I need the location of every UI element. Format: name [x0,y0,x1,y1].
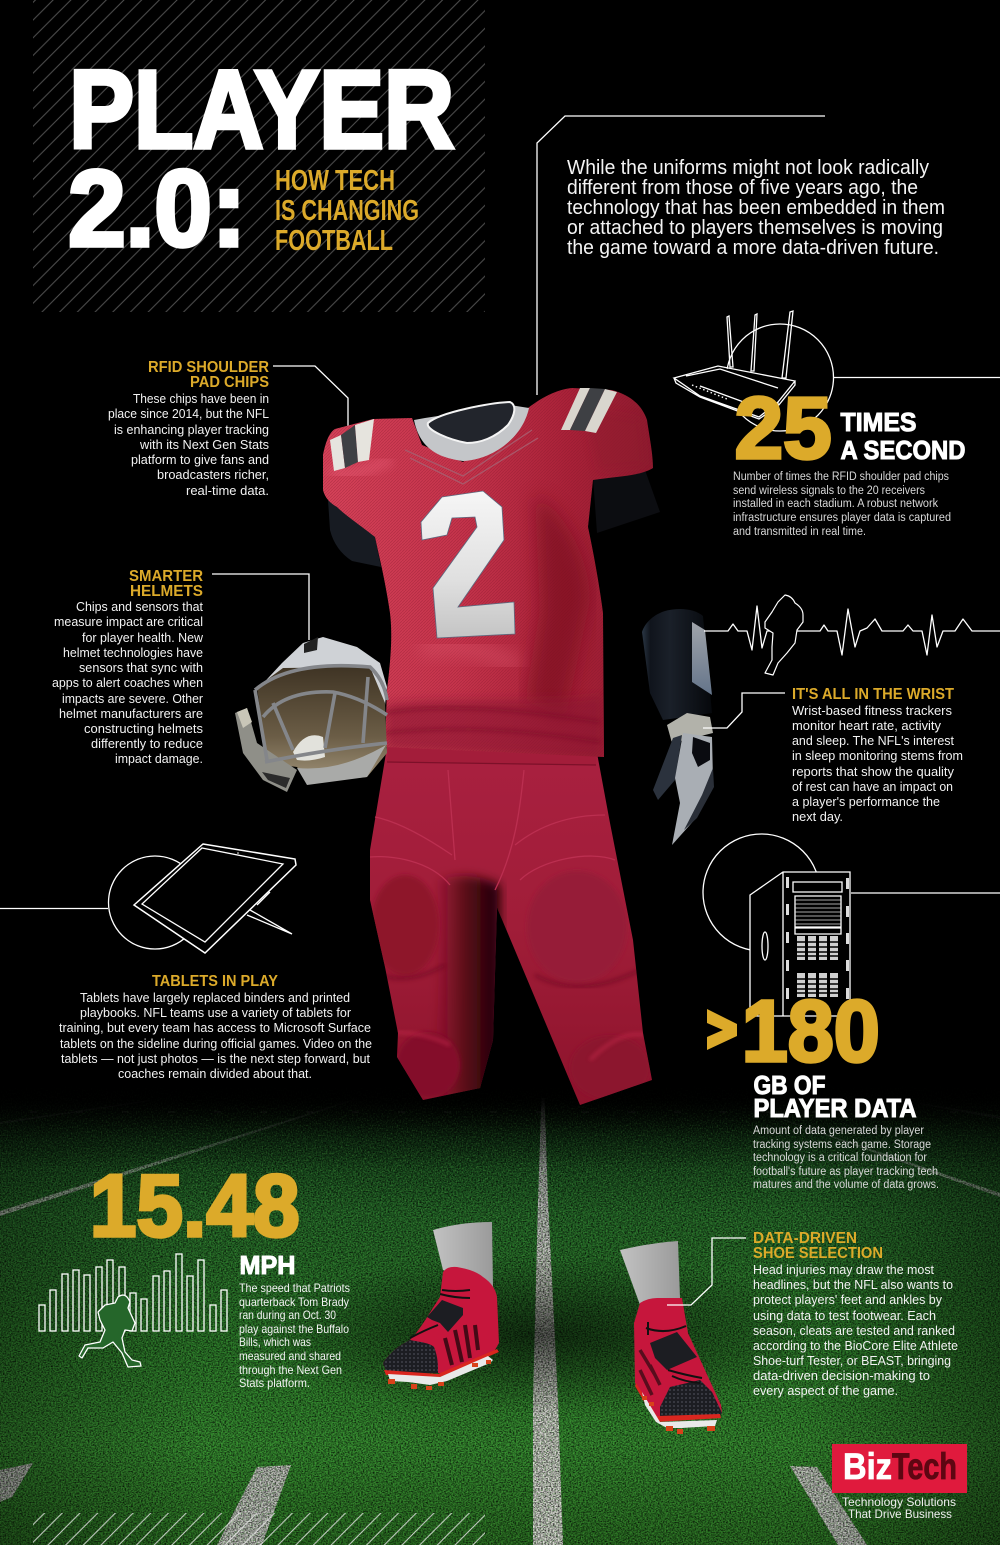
text: tablets in play: tablets — not just photos — is the next step forward, but [61,1052,371,1066]
stat: 25 times a second: 25 [735,380,832,477]
text: tablets in play: Tablets have largely replaced binders and printed [80,991,350,1005]
text: data-driven shoe selection: DATA-DRIVEN [753,1230,857,1247]
right cleat and sock [620,1241,722,1434]
stat: 15.48 MPH: measured and shared [239,1349,341,1363]
helmet [235,637,387,792]
text: RFID shoulder pad chips: place since 2014, but the NFL [108,407,269,421]
subtitle: HOW TECH [275,165,395,197]
intro paragraph: the game toward a more data-driven future. [567,237,939,259]
BizTech logo: Technology Solutions [842,1495,956,1509]
left cleat and sock [383,1222,499,1390]
BizTech logo [832,1444,967,1521]
intro paragraph: different from those of five years ago, the [567,177,918,199]
text: RFID shoulder pad chips: broadcasters richer, [157,468,269,482]
icon: router with circle [674,311,1000,431]
text: tablets in play: playbooks. NFL teams use a variety of tablets for [80,1006,351,1020]
stat: >180 GB of player data: PLAYER DATA [754,1095,916,1123]
stat: >180 GB of player data: matures and the volume of data grows. [753,1179,939,1191]
text: RFID shoulder pad chips: platform to give fans and [131,453,269,467]
BizTech logo: Tech [892,1446,957,1487]
icon: server tower with circle [703,834,1000,1016]
text: smarter helmets: HELMETS [130,583,203,600]
stat: >180 GB of player data [707,983,939,1191]
text: data-driven shoe selection [753,1230,958,1398]
stat: >180 GB of player data: 180 [742,983,880,1080]
text: tablets in play: TABLETS IN PLAY [152,973,278,990]
text: RFID shoulder pad chips: RFID SHOULDER [148,359,269,376]
text: data-driven shoe selection: using data to test footwear. Each [753,1309,936,1323]
text: smarter helmets: apps to alert coaches when [52,676,203,690]
jersey number 2 [421,491,515,638]
text: smarter helmets: for player health. New [82,631,204,645]
BizTech logo: Biz [843,1446,892,1487]
title [68,49,454,269]
text: smarter helmets: helmet manufacturers are [59,707,203,721]
stat: 15.48 MPH: ran during an Oct. 30 [239,1308,336,1322]
left undersleeve [328,500,381,567]
stat: 15.48 MPH: quarterback Tom Brady [239,1295,349,1309]
stat: 15.48 MPH [90,1156,350,1390]
text: smarter helmets: differently to reduce [91,737,203,751]
stat: 25 times a second: TIMES [840,407,916,437]
text: data-driven shoe selection: SHOE SELECTION [753,1245,883,1262]
text: data-driven shoe selection: according to the BioCore Elite Athlete [753,1339,958,1353]
text: RFID shoulder pad chips: PAD CHIPS [190,374,269,391]
text: smarter helmets: helmet technologies have [63,646,203,660]
text: it's all in the wrist: a player's performance the [792,795,940,809]
stat: 15.48 MPH: 15.48 [90,1156,300,1255]
text: smarter helmets: impact damage. [115,752,203,766]
intro leader line [537,116,825,395]
text: data-driven shoe selection: protect players' feet and ankles by [753,1293,943,1307]
text: smarter helmets: SMARTER [129,568,203,585]
text: it's all in the wrist: monitor heart rate, activity [792,719,942,733]
stat: 15.48 MPH: Stats platform. [239,1376,310,1390]
title: 2.0: [68,148,246,269]
text: smarter helmets: sensors that sync with [79,661,203,675]
text: tablets in play: coaches remain divided about that. [118,1067,312,1081]
text: RFID shoulder pad chips: with its Next Gen Stats [139,438,269,452]
stat: >180 GB of player data: technology is a critical foundation for [753,1152,927,1164]
text: smarter helmets: measure impact are critical [54,615,203,629]
intro paragraph: While the uniforms might not look radically [567,157,929,179]
text: it's all in the wrist: Wrist-based fitness trackers [792,704,952,718]
stat: >180 GB of player data: GB OF [754,1072,826,1100]
text: it's all in the wrist [792,686,963,824]
text: RFID shoulder pad chips: real-time data. [186,484,269,498]
text: smarter helmets: impacts are severe. Other [62,692,203,706]
stat: >180 GB of player data: Amount of data generated by player [753,1125,924,1137]
arm pad [642,609,712,720]
stat: 15.48 MPH: through the Next Gen [239,1363,342,1377]
stat: 15.48 MPH: play against the Buffalo [239,1322,349,1336]
stat: 25 times a second: installed in each stadium. A robust network [733,498,938,510]
stat: 25 times a second: A SECOND [840,435,966,465]
text: it's all in the wrist: next day. [792,810,843,824]
text: data-driven shoe selection: data-driven decision-making to [753,1369,930,1383]
right undersleeve [593,470,660,533]
text: smarter helmets: Chips and sensors that [76,600,204,614]
hatched title panel [33,0,485,312]
text: RFID shoulder pad chips [108,359,269,498]
text: data-driven shoe selection: Head injuries may draw the most [753,1263,935,1277]
stat: 25 times a second [733,380,966,538]
stat: 25 times a second: infrastructure ensures player data is captured [733,512,951,524]
stat: >180 GB of player data: tracking systems each game. Storage [753,1139,931,1151]
text: tablets in play [59,973,372,1081]
subtitle: FOOTBALL [275,225,393,257]
stat: 15.48 MPH: The speed that Patriots [239,1281,350,1295]
stat: 15.48 MPH: Bills, which was [239,1335,311,1349]
jersey collar [414,402,529,461]
text: it's all in the wrist: IT'S ALL IN THE WRIST [792,686,954,703]
glove [653,713,714,845]
intro paragraph: technology that has been embedded in them [567,197,945,219]
text: tablets in play: training, but every team has access to Microsoft Surface [59,1021,371,1035]
heartbeat line with runner [704,595,1000,675]
intro paragraph: or attached to players themselves is moving [567,217,943,239]
stat: >180 GB of player data: football's future as player tracking tech [753,1166,938,1178]
football field [0,1084,1000,1545]
BizTech logo: That Drive Business [848,1507,952,1521]
icon: speed bars with runner [39,1254,227,1367]
text: data-driven shoe selection: every aspect of the game. [753,1384,898,1398]
stat: 25 times a second: Number of times the RFID shoulder pad chips [733,471,949,483]
shoulder stripes [330,388,617,471]
subtitle: IS CHANGING [275,195,419,227]
bottom hatch strip [33,1513,485,1545]
text: data-driven shoe selection: Shoe-turf Tester, or BEAST, bringing [753,1354,951,1368]
text: it's all in the wrist: of rest can have an impact on [792,780,953,794]
RFID leader line [273,366,348,430]
title: PLAYER [69,49,454,172]
stat: 25 times a second: send wireless signals to the 20 receivers [733,485,925,497]
pants [370,747,652,1105]
text: it's all in the wrist: reports that show the quality [792,765,955,779]
intro paragraph [567,157,945,259]
wrist leader line [703,693,785,728]
jersey [320,385,660,760]
text: it's all in the wrist: and sleep. The NFL's interest [792,734,955,748]
helmets leader line [212,574,309,640]
stat: 15.48 MPH: MPH [240,1252,296,1280]
subtitle [275,165,419,257]
text: data-driven shoe selection: season, cleats are tested and ranked [753,1324,955,1338]
text: it's all in the wrist: in sleep monitoring stems from [792,749,963,763]
stat: 25 times a second: and transmitted in real time. [733,526,866,538]
text: RFID shoulder pad chips: is enhancing player tracking [114,423,269,437]
text: tablets in play: tablets on the sideline during official games. Video on the [60,1037,372,1051]
shoe leader line [667,1238,746,1305]
text: smarter helmets [52,568,204,766]
text: data-driven shoe selection: headlines, but the NFL also wants to [753,1278,953,1292]
icon: tablet with circle [0,844,296,953]
text: smarter helmets: constructing helmets [84,722,203,736]
text: RFID shoulder pad chips: These chips have been in [133,392,269,406]
